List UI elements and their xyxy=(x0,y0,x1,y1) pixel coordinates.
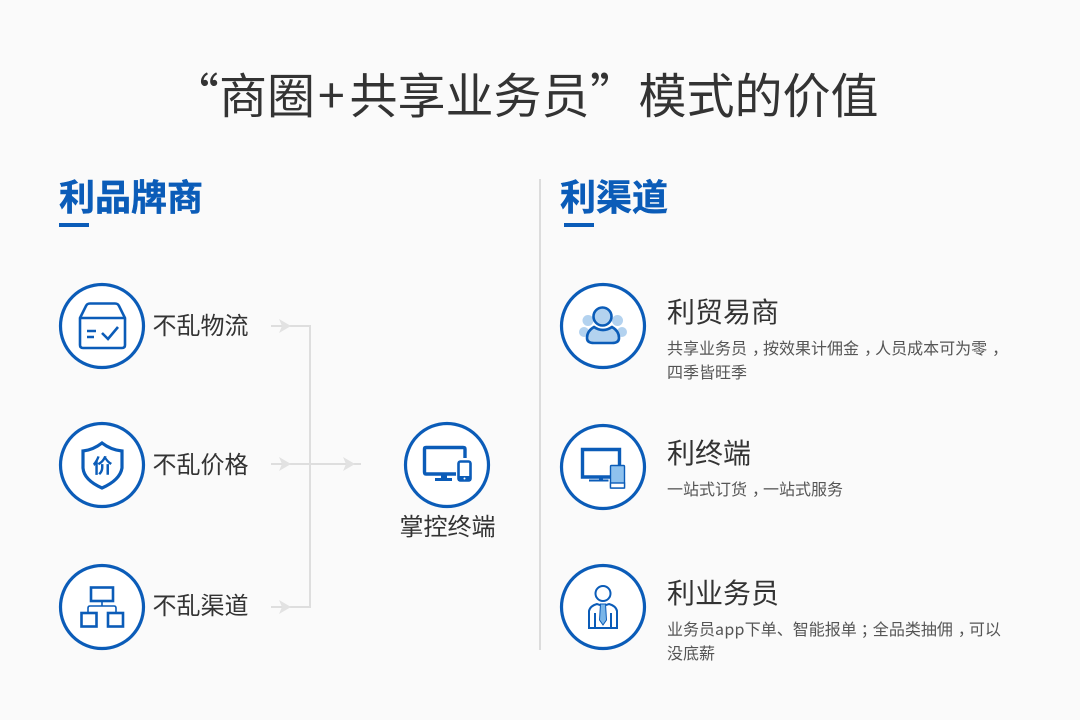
title: “ xyxy=(171,57,219,127)
item: 不乱物流 xyxy=(60,284,248,368)
description xyxy=(667,616,1001,663)
item: 利贸易商 xyxy=(562,284,1008,382)
center node: 掌控终端 xyxy=(400,424,496,541)
title xyxy=(171,57,879,127)
divider xyxy=(539,179,541,650)
heading: 利贸易商 xyxy=(667,297,779,328)
icon: box with check xyxy=(60,284,144,368)
description: 共享业务员 ，按效果计佣金 ，人员成本可为零 ， xyxy=(667,340,1008,358)
icon: people group xyxy=(562,284,644,368)
description: 一站式订货 ，一站式服务 xyxy=(667,481,843,499)
item: 不乱渠道 xyxy=(60,566,248,648)
icon: price shield: 价 xyxy=(92,456,112,478)
title: 模式的价值 xyxy=(638,71,879,124)
label: 不乱渠道 xyxy=(152,593,248,620)
heading: 利渠道: 利渠道 xyxy=(560,177,668,218)
title: 共享业务员 xyxy=(350,71,590,124)
item: 不乱价格 xyxy=(60,424,248,506)
label: 不乱价格 xyxy=(152,452,248,479)
description: 没底薪 xyxy=(667,645,715,663)
item: 利终端 xyxy=(562,426,843,508)
heading: 利业务员 xyxy=(667,578,779,609)
heading: 利品牌商: 利品牌商 xyxy=(59,177,203,218)
title: 商圈 xyxy=(219,71,315,124)
icon: monitor and phone xyxy=(406,424,488,506)
icon: monitor and tablet xyxy=(562,426,644,508)
label: 不乱物流 xyxy=(152,313,248,340)
item: 利业务员 xyxy=(562,566,1001,663)
icon: price shield xyxy=(60,424,144,506)
icon: org chart xyxy=(60,566,144,648)
description xyxy=(667,340,1008,382)
icon: person with tie xyxy=(562,566,644,648)
description: 业务员app下单、智能报单；全品类抽佣 ，可以 xyxy=(667,616,1001,640)
title: + xyxy=(318,57,345,127)
title: ” xyxy=(590,57,638,127)
heading: 利终端 xyxy=(667,438,751,469)
label: 掌控终端 xyxy=(400,514,496,541)
connector arrows xyxy=(271,319,361,614)
description: 四季皆旺季 xyxy=(667,364,747,382)
